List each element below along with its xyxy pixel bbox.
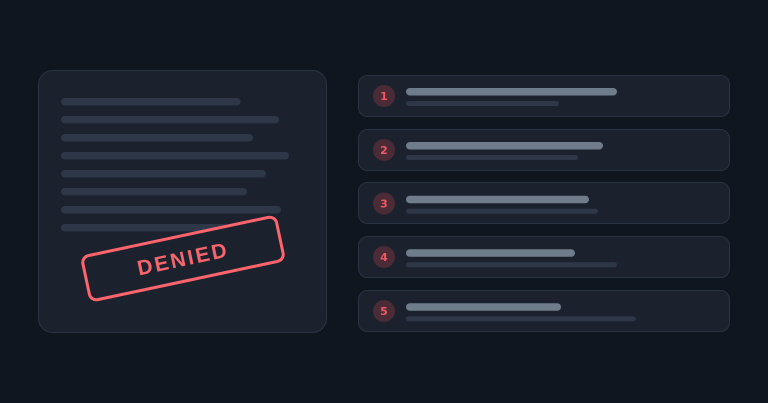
document text lines: [61, 98, 289, 231]
reason row 5: [358, 290, 730, 332]
subtitle bar 2: [406, 155, 578, 160]
number badge 3: [373, 192, 395, 214]
title bar 3: [406, 196, 589, 203]
number badge 5: 5: [380, 305, 388, 318]
title bar 4: [406, 249, 575, 257]
number badge 2: [373, 139, 395, 161]
reason row 1: [358, 76, 730, 116]
stamp: denied: DENIED: [135, 239, 231, 280]
subtitle bar 1: [406, 101, 559, 106]
title bar 1: [406, 88, 617, 96]
number badge 4: [373, 246, 395, 268]
title bar 5: [406, 303, 561, 311]
stamp: denied: [81, 216, 285, 301]
reason row 3: [358, 182, 730, 224]
reason row 4: [358, 236, 730, 278]
number badge 5: [373, 300, 395, 322]
subtitle bar 4: [406, 262, 617, 267]
number badge 2: 2: [380, 144, 388, 157]
panel: denied document: [38, 70, 326, 332]
number badge 4: 4: [380, 251, 388, 264]
number badge 1: [373, 85, 395, 107]
subtitle bar 5: [406, 316, 636, 321]
reason row 2: [358, 130, 730, 170]
title bar 2: [406, 142, 603, 150]
subtitle bar 3: [406, 209, 598, 214]
number badge 3: 3: [380, 198, 388, 210]
number badge 1: 1: [380, 90, 388, 103]
